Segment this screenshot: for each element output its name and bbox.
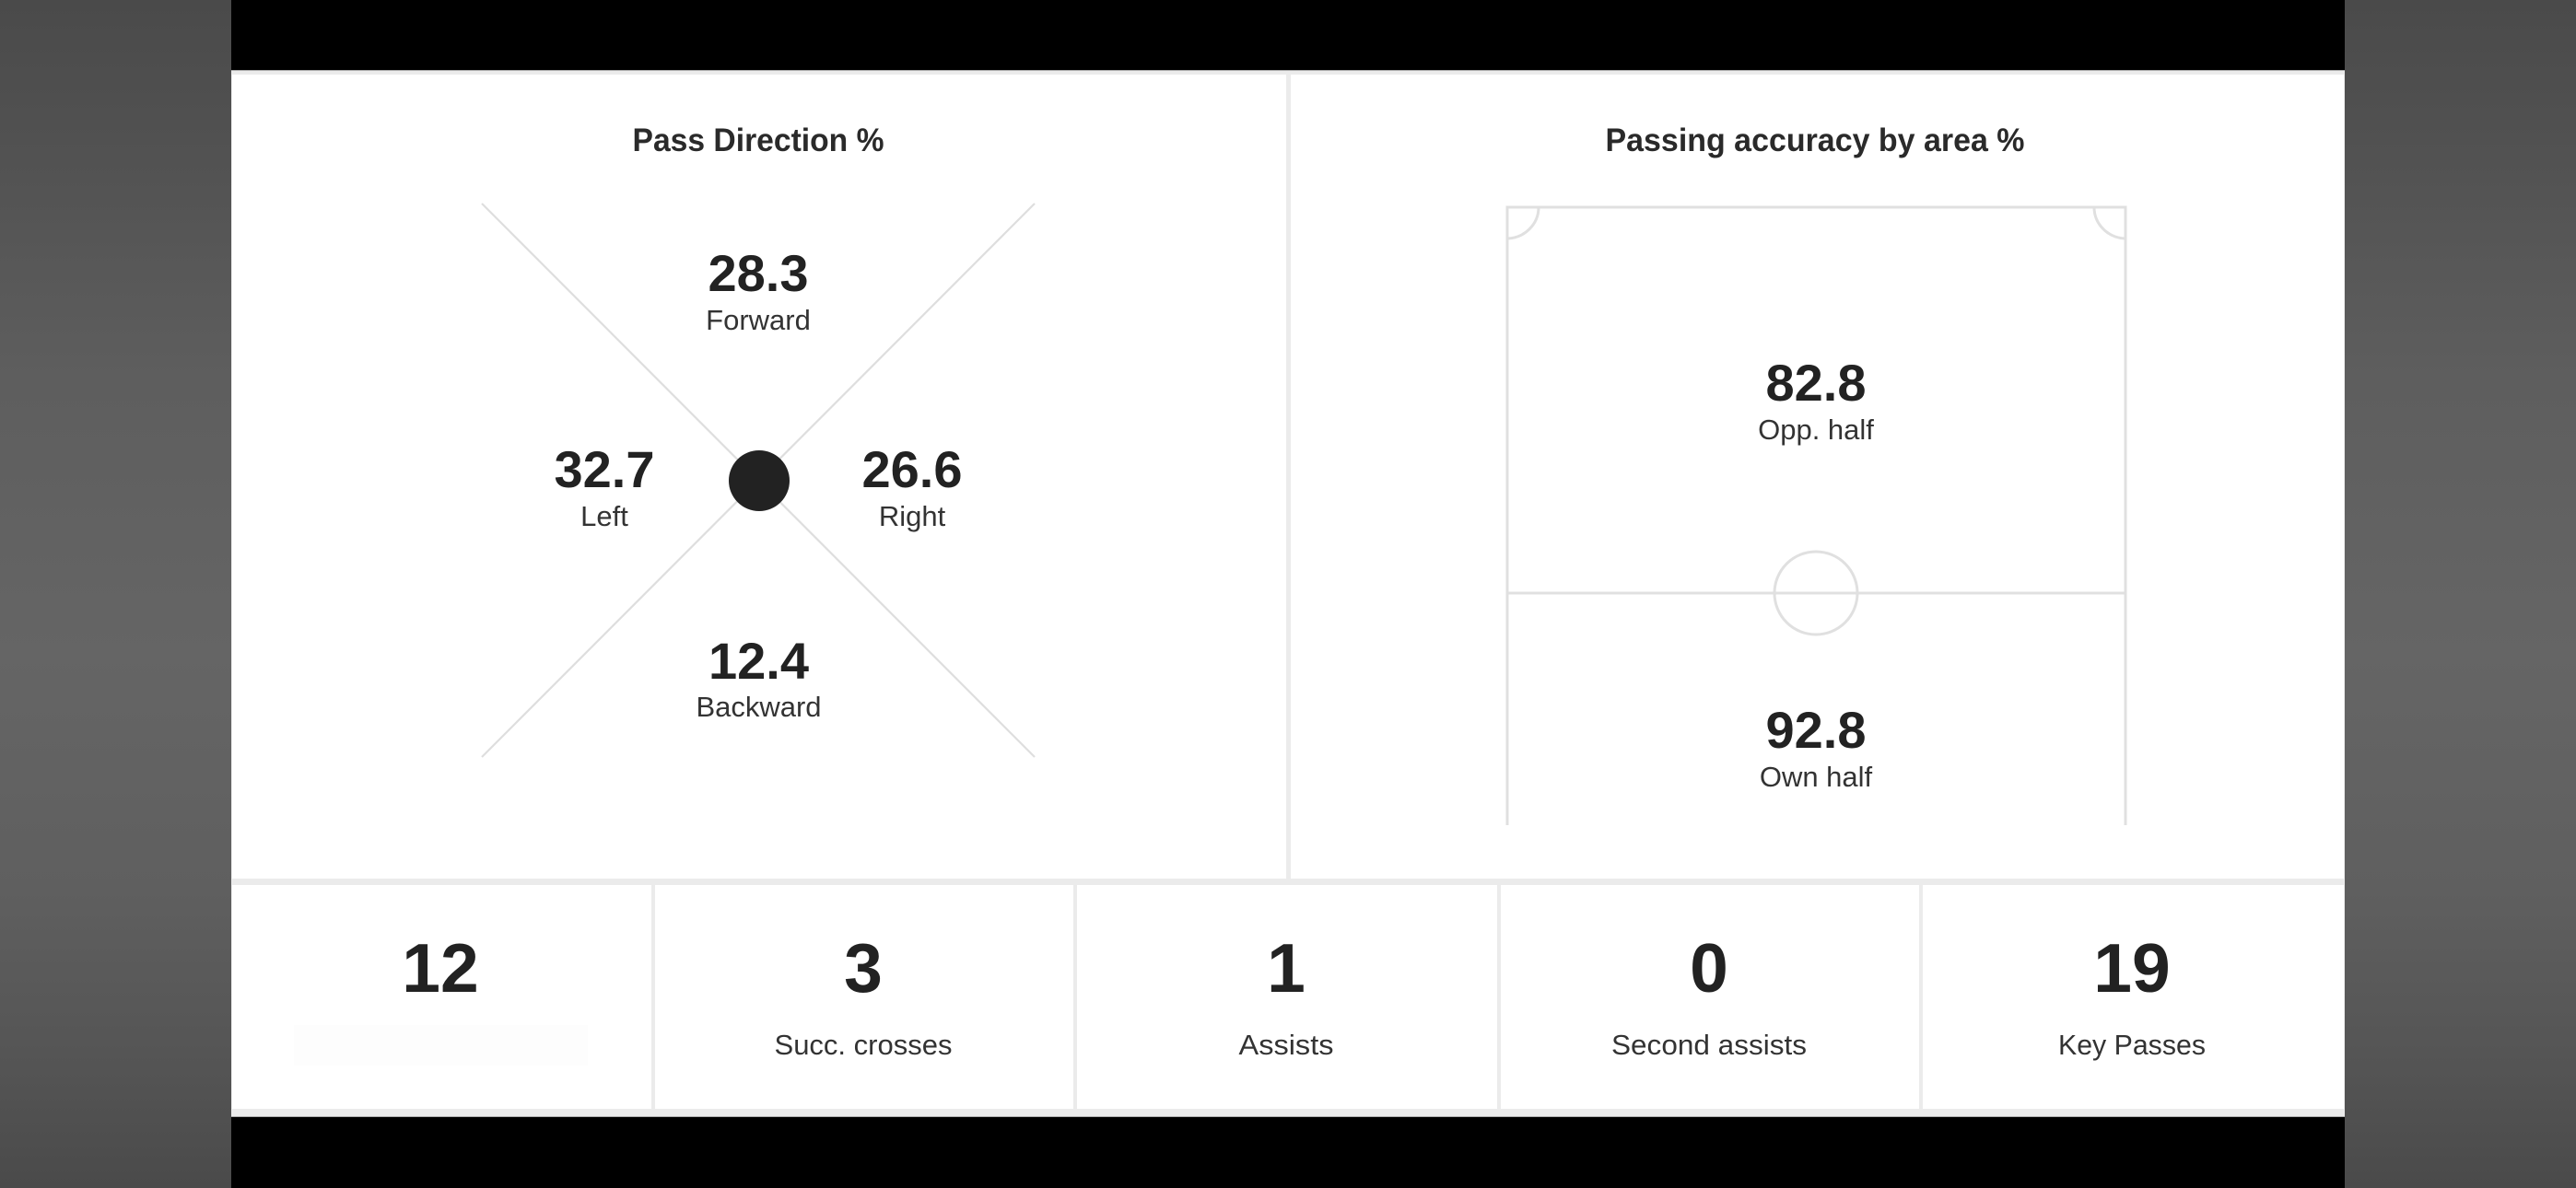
stat: left: Left xyxy=(580,500,628,532)
stat: backward: Backward xyxy=(696,691,822,723)
stat: own half: Own half xyxy=(1760,761,1873,793)
stat: forward xyxy=(706,244,811,336)
stat tile: key passes: Key Passes xyxy=(2058,1029,2206,1061)
stat tile: succ crosses xyxy=(775,929,952,1061)
stat: own half: 92.8 xyxy=(1765,701,1867,759)
stat tile: assists: 1 xyxy=(1267,929,1306,1007)
stat tile: assists xyxy=(1238,929,1334,1061)
stat tile: unlabelled 12: 12 xyxy=(402,929,479,1007)
bottom black bar xyxy=(231,1116,2345,1188)
stat tile: key passes: 19 xyxy=(2093,929,2171,1007)
stat tile: second assists xyxy=(1611,929,1807,1061)
stat: opp half: 82.8 xyxy=(1765,354,1867,412)
stat: right xyxy=(862,440,962,532)
stat: opp half xyxy=(1758,354,1874,446)
panel: pass direction xyxy=(482,122,1035,757)
stat tile: succ crosses: 3 xyxy=(844,929,883,1007)
stat: right: Right xyxy=(879,500,946,532)
chart: pitch outline xyxy=(1507,207,2125,825)
heading: pass direction: Pass Direction % xyxy=(632,122,884,158)
stats card xyxy=(231,70,2345,1117)
stat tile: second assists: 0 xyxy=(1690,929,1728,1007)
top black bar xyxy=(231,0,2345,71)
stat tile: key passes xyxy=(2058,929,2206,1061)
stat tile: second assists: Second assists xyxy=(1611,1029,1807,1061)
stat: left: 32.7 xyxy=(555,440,654,498)
stat: backward xyxy=(696,632,822,723)
stat: own half xyxy=(1760,701,1873,793)
stat: left xyxy=(555,440,654,532)
panel: passing accuracy by area xyxy=(1507,122,2125,825)
stat tile: succ crosses: Succ. crosses xyxy=(775,1029,952,1061)
stat: forward: Forward xyxy=(706,304,811,336)
stat tile: assists: Assists xyxy=(1238,1029,1334,1061)
heading: passing accuracy: Passing accuracy by area % xyxy=(1605,122,2025,158)
stat: right: 26.6 xyxy=(862,440,962,498)
stat: backward: 12.4 xyxy=(708,632,809,690)
stat: forward: 28.3 xyxy=(708,244,809,302)
stat: opp half: Opp. half xyxy=(1758,413,1874,446)
chart: direction cross xyxy=(482,204,1035,757)
